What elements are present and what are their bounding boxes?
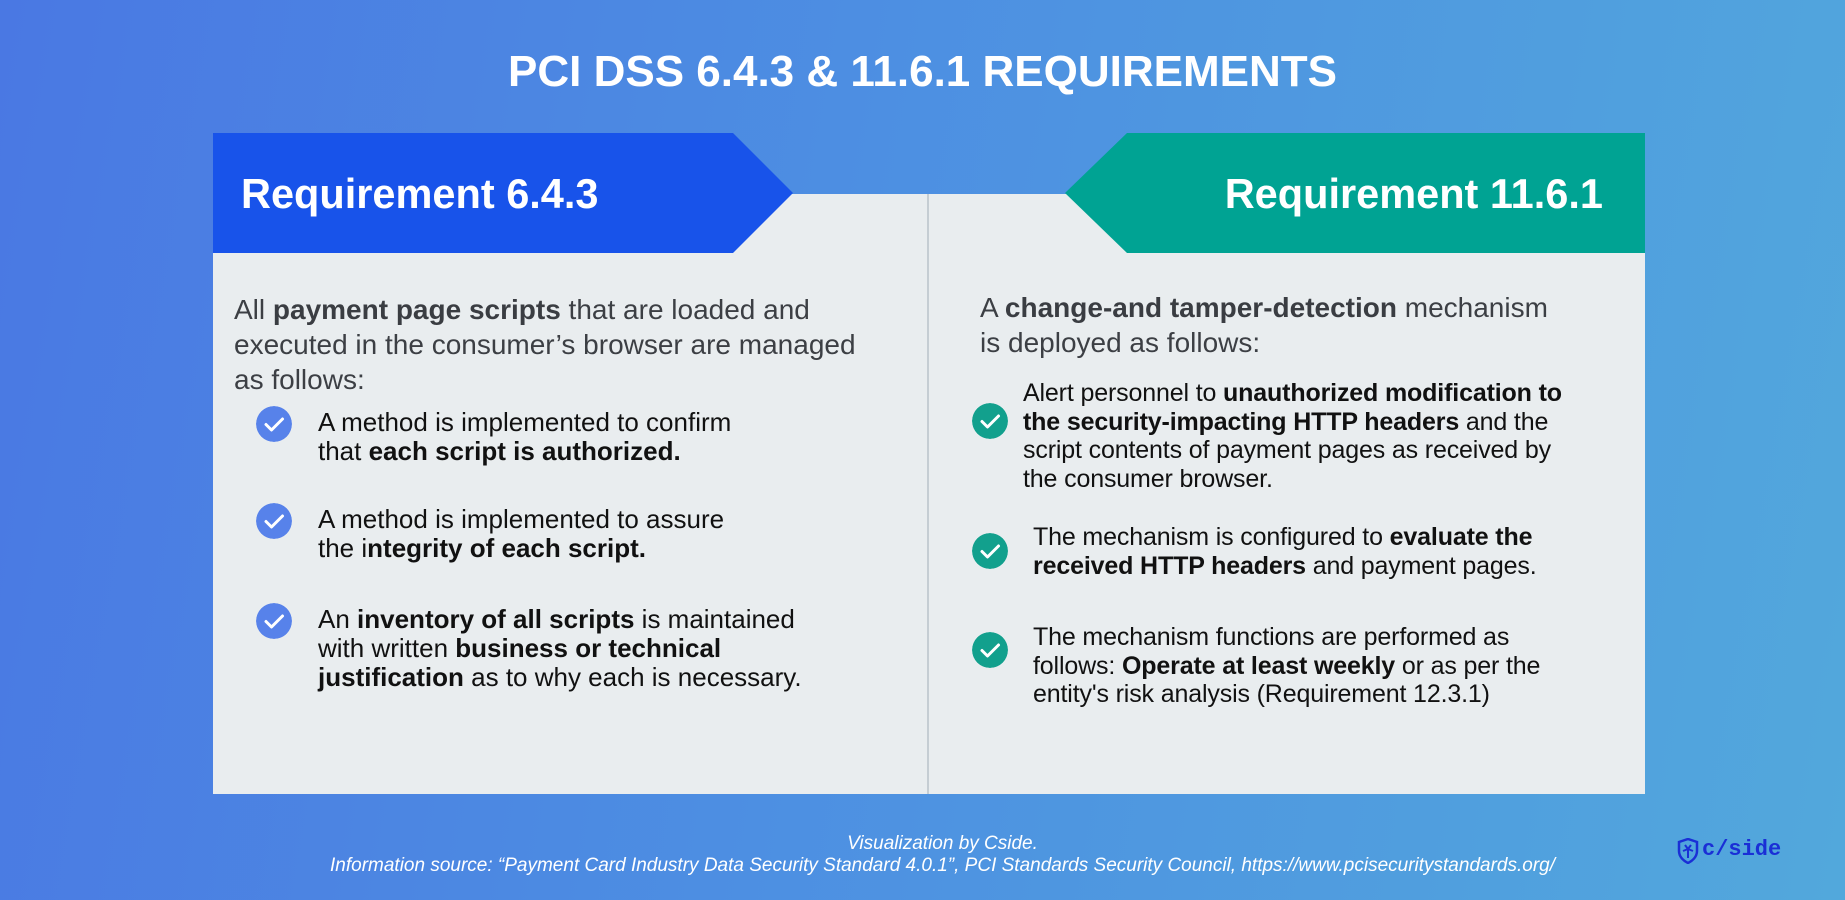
left bullet 1: that each script is authorized. bbox=[318, 436, 681, 466]
left intro text: All payment page scripts that are loaded and bbox=[234, 294, 810, 325]
header: requirement 11.6.1 bbox=[1065, 133, 1645, 253]
check icon bbox=[972, 632, 1008, 668]
footer credits bbox=[330, 833, 1557, 876]
check icon bbox=[972, 533, 1008, 569]
left bullet 3: with written business or technical bbox=[318, 633, 721, 663]
header: requirement 6.4.3: Requirement 6.4.3 bbox=[241, 170, 598, 217]
left bullet 3: justification as to why each is necessary. bbox=[318, 662, 802, 692]
right bullet 1: the security-impacting HTTP headers and the bbox=[1023, 408, 1548, 436]
right bullet 2: received HTTP headers and payment pages. bbox=[1033, 552, 1537, 580]
left bullet 1 bbox=[256, 406, 731, 466]
left intro text: executed in the consumer’s browser are managed bbox=[234, 329, 856, 360]
check icon bbox=[256, 603, 292, 639]
divider bbox=[927, 194, 929, 794]
title: PCI DSS 6.4.3 & 11.6.1 REQUIREMENTS bbox=[508, 47, 1337, 96]
right bullet 3: The mechanism functions are performed as bbox=[1033, 623, 1509, 651]
right bullet 1: the consumer browser. bbox=[1023, 464, 1273, 492]
left intro text: as follows: bbox=[234, 364, 365, 395]
right intro text bbox=[980, 292, 1548, 358]
right bullet 3 bbox=[972, 623, 1540, 708]
left bullet 2: the integrity of each script. bbox=[318, 533, 646, 563]
check icon bbox=[972, 403, 1008, 439]
header: requirement 11.6.1: Requirement 11.6.1 bbox=[1225, 170, 1603, 217]
panel bbox=[213, 194, 1645, 794]
left intro text bbox=[234, 294, 856, 395]
right bullet 3: follows: Operate at least weekly or as per the bbox=[1033, 652, 1540, 680]
right intro text: A change-and tamper-detection mechanism bbox=[980, 292, 1548, 323]
logo: c/side: c/side bbox=[1702, 837, 1781, 862]
right bullet 1 bbox=[972, 379, 1562, 492]
check icon bbox=[256, 406, 292, 442]
icon: shield bbox=[1678, 838, 1698, 864]
footer credits: Visualization by Cside. bbox=[847, 833, 1038, 854]
right bullet 1: script contents of payment pages as received by bbox=[1023, 436, 1551, 464]
left bullet 2 bbox=[256, 503, 724, 563]
right bullet 1: Alert personnel to unauthorized modification to bbox=[1023, 379, 1562, 407]
check icon bbox=[256, 503, 292, 539]
left bullet 3: An inventory of all scripts is maintained bbox=[318, 604, 795, 634]
left bullet 1: A method is implemented to confirm bbox=[318, 407, 731, 437]
left bullet 2: A method is implemented to assure bbox=[318, 504, 724, 534]
header: requirement 6.4.3 bbox=[213, 133, 793, 253]
footer credits: Information source: “Payment Card Industry Data Security Standard 4.0.1”, PCI Standards Security Council, https://www.pcisecuritystandards.org/ bbox=[330, 855, 1555, 876]
left bullet 3 bbox=[256, 603, 802, 692]
right bullet 2 bbox=[972, 523, 1537, 580]
right bullet 3: entity's risk analysis (Requirement 12.3.1) bbox=[1033, 680, 1490, 708]
right intro text: is deployed as follows: bbox=[980, 327, 1260, 358]
right bullet 2: The mechanism is configured to evaluate the bbox=[1033, 523, 1532, 551]
